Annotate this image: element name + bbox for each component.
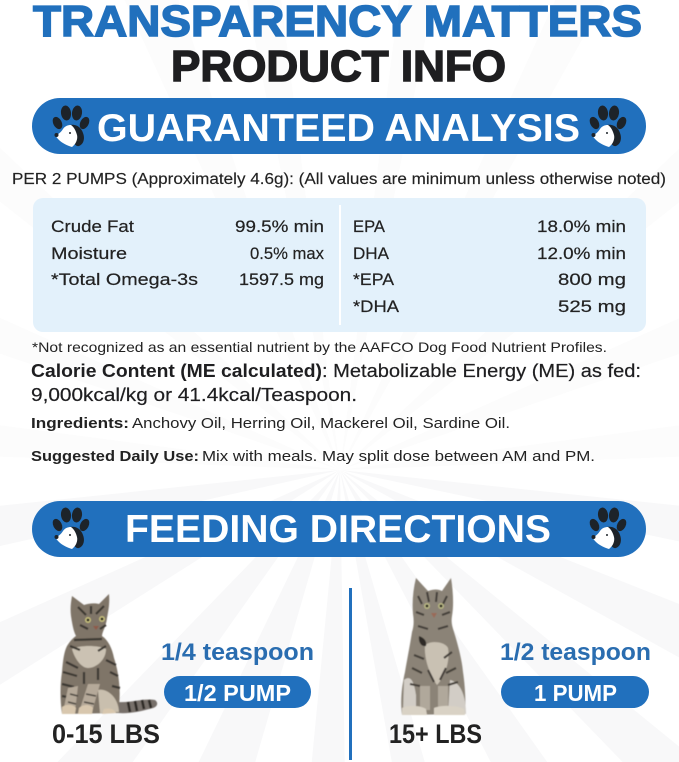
text block: AAFCO note: *Not recognized as an essential nutrient by the AAFCO Dog Food Nutrient Profiles. xyxy=(32,339,607,355)
row: EPA: 18.0% min xyxy=(537,217,626,236)
text: 1/2 teaspoon: 1/2 teaspoon xyxy=(500,639,651,666)
row: moisture: Moisture xyxy=(51,244,127,263)
text block: ingredients: Anchovy Oil, Herring Oil, Mackerel Oil, Sardine Oil. xyxy=(132,415,510,432)
title xyxy=(33,0,642,91)
row: DHA: 12.0% min xyxy=(537,244,626,263)
row: *EPA xyxy=(353,270,626,289)
row: *EPA: 800 mg xyxy=(558,270,626,289)
divider xyxy=(349,588,352,760)
row: total omega-3s: *Total Omega-3s xyxy=(51,270,198,289)
pill: 1/2 pump: 1/2 PUMP xyxy=(184,680,291,706)
row: *EPA: *EPA xyxy=(353,270,395,289)
text block: suggested daily use xyxy=(31,448,595,465)
icon: small tabby cat xyxy=(60,594,157,714)
text block: suggested daily use: Mix with meals. May split dose between AM and PM. xyxy=(202,448,595,465)
row: crude fat: 99.5% min xyxy=(235,217,324,236)
row: crude fat: Crude Fat xyxy=(51,217,134,236)
icon: maine coon cat xyxy=(401,578,466,715)
icon: paw left xyxy=(51,507,91,549)
icon: paw left xyxy=(51,105,91,147)
text block: ingredients: Ingredients: xyxy=(31,415,129,432)
row: *DHA: *DHA xyxy=(353,297,400,316)
heading: feeding directions: FEEDING DIRECTIONS xyxy=(125,508,551,551)
banner: feeding directions xyxy=(32,501,646,557)
text block: calorie content: Calorie Content (ME calculated) xyxy=(31,361,322,381)
row: moisture xyxy=(51,244,324,263)
row: DHA xyxy=(353,244,626,263)
pill: 1 pump: 1 PUMP xyxy=(534,680,617,706)
row: *DHA xyxy=(353,297,626,316)
label: 15+ lbs: 15+ LBS xyxy=(389,719,482,749)
text block: calorie content: 9,000kcal/kg or 41.4kcal/Teaspoon. xyxy=(31,385,357,405)
heading: guaranteed analysis: GUARANTEED ANALYSIS xyxy=(97,107,580,150)
row: moisture: 0.5% max xyxy=(250,244,324,263)
panel: analysis table xyxy=(33,198,646,332)
icon: paw right xyxy=(588,507,628,549)
label: 0-15 lbs: 0-15 LBS xyxy=(52,719,160,749)
icon: paw right xyxy=(588,105,628,147)
row: crude fat xyxy=(51,217,324,236)
per serving note: PER 2 PUMPS (Approximately 4.6g): (All values are minimum unless otherwise noted) xyxy=(12,171,666,188)
row: total omega-3s: 1597.5 mg xyxy=(239,270,324,289)
text: 1/4 teaspoon: 1/4 teaspoon xyxy=(161,639,314,666)
row: EPA: EPA xyxy=(353,217,386,236)
text block: calorie content: : Metabolizable Energy (ME) as fed: xyxy=(322,361,641,381)
pill: 1 pump xyxy=(501,676,649,708)
row: EPA xyxy=(353,217,626,236)
banner: guaranteed analysis xyxy=(32,98,646,154)
title line: product info: PRODUCT INFO xyxy=(171,42,506,91)
row: DHA: DHA xyxy=(353,244,390,263)
row: *DHA: 525 mg xyxy=(558,297,626,316)
text block: suggested daily use: Suggested Daily Use: xyxy=(31,448,199,465)
text block: calorie content xyxy=(31,361,641,405)
row: total omega-3s xyxy=(51,270,324,289)
pill: 1/2 pump xyxy=(164,676,311,708)
